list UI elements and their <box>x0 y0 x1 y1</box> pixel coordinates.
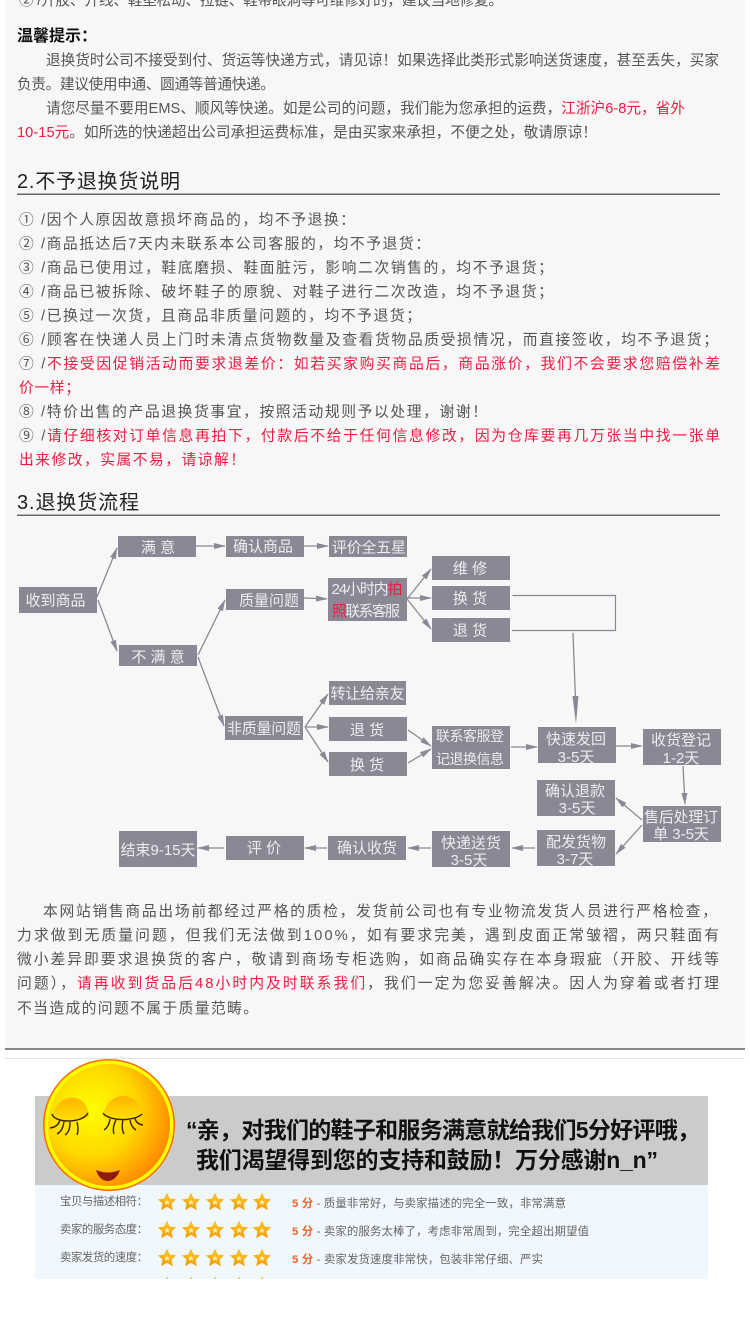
node: non-quality issue <box>225 716 303 740</box>
heading: section 2: 2.不予退换货说明 <box>17 170 180 193</box>
flowchart: return process <box>19 536 721 869</box>
rating row 3: 卖家发货的速度： <box>60 1250 148 1264</box>
node: photo within 24 hours: 24小时内拍 <box>332 581 402 598</box>
node: satisfied <box>118 536 196 557</box>
node: repair <box>432 556 510 580</box>
panel: no-return conditions list <box>19 210 720 468</box>
text: note line 3: 微小差异即要求退换货的客户，敬请到商场专柜选购，如商品确实存在本身瑕疵（开胶、开线等 <box>17 950 719 968</box>
banner background <box>35 1096 708 1185</box>
list item 6: ⑥ /顾客在快递人员上门时未清点货物数量及查看货物品质受损情况，而直接签收，均不予退货； <box>19 332 718 348</box>
node: courier delivery: 快递送货 <box>441 835 501 852</box>
node: return: 退 货 <box>453 622 487 640</box>
divider under section 2 <box>17 194 720 195</box>
node: contact service and register <box>432 726 510 769</box>
node: after-sales order handling <box>643 806 721 843</box>
node: receipt registration: 1-2天 <box>663 750 699 767</box>
rating row 1: 宝贝与描述相符： <box>60 1194 148 1208</box>
text: note line 5: 不当造成的问题不属于质量范畴。 <box>17 1000 258 1017</box>
node: quality issue <box>226 589 304 610</box>
rating row 2 <box>60 1220 589 1238</box>
node: dispatch goods: 3-7天 <box>557 851 593 868</box>
icon: smiley face with closed eyes <box>43 1059 175 1191</box>
rating row 1 <box>60 1192 566 1210</box>
node: repair: 维 修 <box>453 560 487 578</box>
text: note line 1: 本网站销售商品出场前都经过严格的质检，发货前公司也有专业物流发货人员进行严格检查， <box>43 903 717 920</box>
node: after-sales order handling: 售后处理订 <box>644 809 718 826</box>
heading: warm tips: 温馨提示： <box>17 27 97 45</box>
banner slogan line 1: “亲，对我们的鞋子和服务满意就给我们5分好评哦， <box>186 1117 700 1143</box>
text: tips line 2: 负责。建议使用申通、圆通等普通快递。 <box>17 75 275 93</box>
list item 7: ⑦ /不接受因促销活动而要求退差价：如若买家购买商品后，商品涨价，我们不会要求您赔偿补差 <box>19 356 720 372</box>
node: give to friends <box>329 681 406 705</box>
panel: warm tips <box>17 27 719 141</box>
node: five star review: 评价全五星 <box>332 538 406 556</box>
divider under section 3 <box>17 514 720 516</box>
rating row 1: 5 分 - 质量非常好，与卖家描述的完全一致，非常满意 <box>292 1196 566 1210</box>
banner slogan line 2: 我们渴望得到您的支持和鼓励！万分感谢n_n” <box>196 1147 658 1173</box>
node: receipt registration: 收货登记 <box>651 732 711 749</box>
node: return (non-quality): 退 货 <box>350 722 384 739</box>
list item 9: ⑨ /请仔细核对订单信息再拍下，付款后不给于任何信息修改，因为仓库要再几万张当中找一张单 <box>19 428 720 444</box>
list item 9 continued: 出来修改，实属不易，请谅解！ <box>19 452 245 468</box>
text: tips line 3: 请您尽量不要用EMS、顺风等快递。如是公司的问题，我们能为您承担的运费，江浙沪6-8元，省外 <box>46 99 685 117</box>
node: confirm receipt: 确认收货 <box>337 840 397 857</box>
node: confirm refund <box>537 780 615 817</box>
node: return (non-quality) <box>329 717 407 741</box>
node: confirm refund: 3-5天 <box>559 800 595 817</box>
node: receipt registration <box>643 729 721 767</box>
list item 4: ④ /商品已被拆除、破坏鞋子的原貌、对鞋子进行二次改造，均不予退货； <box>19 284 553 300</box>
rating panel background <box>35 1185 708 1279</box>
node: ship back <box>538 727 616 766</box>
node: exchange (non-quality): 换 货 <box>350 757 384 774</box>
divider: panel bottom bar <box>5 1048 745 1050</box>
rating row 2: 5 分 - 卖家的服务太棒了，考虑非常周到，完全超出期望值 <box>292 1224 589 1238</box>
list item 1: ① /因个人原因故意损坏商品的，均不予退换： <box>19 210 355 228</box>
node: after-sales order handling: 单 3-5天 <box>653 826 709 843</box>
node: satisfied: 满 意 <box>141 538 175 556</box>
node: review: 评 价 <box>247 840 281 857</box>
list item 3: ③ /商品已使用过，鞋底磨损、鞋面脏污，影响二次销售的，均不予退货； <box>19 260 553 276</box>
rating row 3 <box>60 1248 543 1266</box>
node: confirm goods: 确认商品 <box>233 538 293 556</box>
list item 8: ⑧ /特价出售的产品退换货事宜，按照活动规则予以处理，谢谢！ <box>19 404 487 420</box>
node: give to friends: 转让给亲友 <box>330 686 404 702</box>
text: note line 4: 问题），请再收到货品后48小时内及时联系我们，我们一定为您妥善解决。因人为穿着或者打理 <box>17 975 719 992</box>
node: exchange <box>432 586 510 610</box>
node: ship back: 3-5天 <box>558 749 594 766</box>
node: contact service and register: 联系客服登 <box>436 728 504 744</box>
rating row 3: 5 分 - 卖家发货速度非常快，包装非常仔细、严实 <box>292 1252 543 1266</box>
node: quality issue: 质量问题 <box>239 592 299 610</box>
text: tips line 1: 退换货时公司不接受到付、货运等快递方式，请见谅！如果选择此类形式影响送货速度，甚至丢失，买家 <box>46 51 719 69</box>
list item 2: ② /商品抵达后7天内未联系本公司客服的，均不予退货： <box>19 236 430 252</box>
heading: section 3: 3.退换货流程 <box>17 491 139 514</box>
node: non-quality issue: 非质量问题 <box>227 720 301 738</box>
node: photo within 24 hours: 照联系客服 <box>332 603 400 620</box>
node: confirm goods <box>226 536 304 557</box>
node: courier delivery: 3-5天 <box>451 852 487 869</box>
node: not satisfied <box>119 645 197 666</box>
node: photo within 24 hours <box>328 578 407 621</box>
list item 7 continued: 价一样； <box>19 380 80 396</box>
node: exchange: 换 货 <box>453 590 487 608</box>
node: contact service and register: 记退换信息 <box>436 751 504 767</box>
node: courier delivery <box>432 831 510 869</box>
node: end 9-15 days <box>119 831 197 867</box>
node: ship back: 快速发回 <box>546 731 606 748</box>
node: confirm receipt <box>328 836 406 860</box>
node: end 9-15 days: 结束9-15天 <box>120 842 196 859</box>
text: tips line 4: 10-15元。如所选的快递超出公司承担运费标准，是由买家来承担，不便之处，敬请原谅！ <box>17 124 597 141</box>
node: dispatch goods: 配发货物 <box>546 834 606 851</box>
list item 5: ⑤ /已换过一次货，且商品非质量问题的，均不予退货； <box>19 308 421 324</box>
panel: review banner <box>35 1096 708 1294</box>
rating row 4 clipped stars <box>166 1276 264 1279</box>
text: note line 2: 力求做到无质量问题，但我们无法做到100%，如有要求完美，遇到皮面正常皱褶，两只鞋面有 <box>17 927 719 944</box>
panel: quality note paragraph <box>17 903 719 1017</box>
divider: thin line <box>5 1058 745 1059</box>
node: confirm refund: 确认退款 <box>545 783 605 800</box>
node: received goods <box>19 587 97 613</box>
node: review <box>226 836 304 860</box>
arrows: flow connectors <box>97 546 685 854</box>
node: received goods: 收到商品 <box>25 592 86 610</box>
node: exchange (non-quality) <box>329 752 407 776</box>
node: return <box>432 618 510 642</box>
rating row 2: 卖家的服务态度： <box>60 1222 148 1236</box>
node: dispatch goods <box>537 830 615 868</box>
panel: return policy background <box>5 0 745 1048</box>
node: not satisfied: 不 满 意 <box>131 648 185 666</box>
